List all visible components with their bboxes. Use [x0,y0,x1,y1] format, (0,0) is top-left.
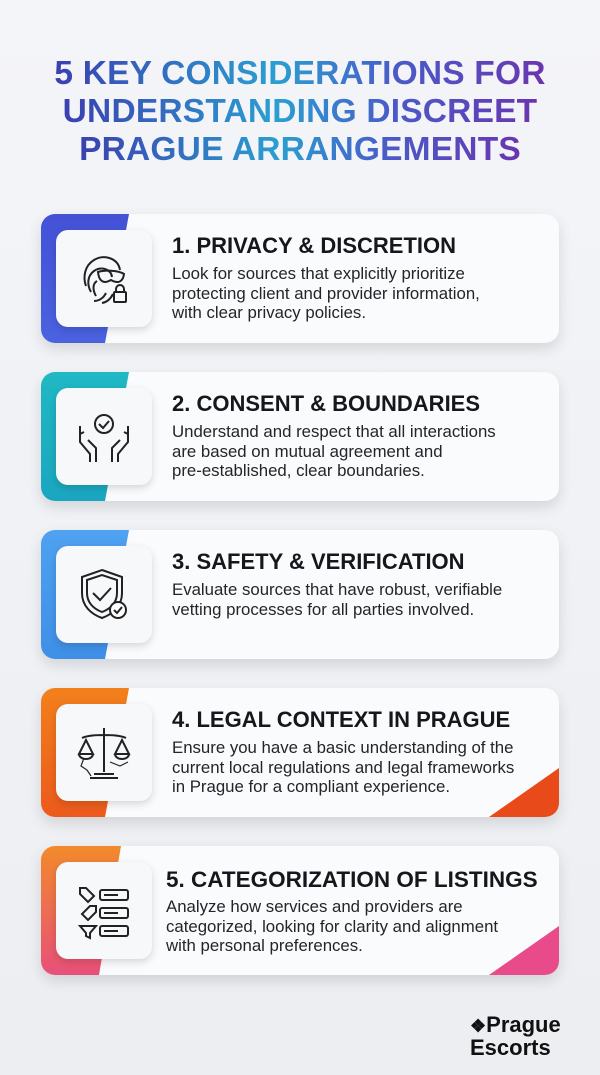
text: current local regulations and legal frameworks [172,758,514,776]
icon: hands check [56,388,152,485]
heading: 5. CATEGORIZATION OF LISTINGS [166,867,538,892]
title: PRAGUE ARRANGEMENTS [79,131,521,168]
logo: Escorts [470,1035,551,1060]
text: vetting processes for all parties involved. [172,600,474,618]
heading: 1. PRIVACY & DISCRETION [172,233,456,258]
logo [470,1012,561,1060]
text: protecting client and provider information, [172,284,480,302]
title [54,55,546,168]
text [172,738,514,796]
icon: shield check [56,546,152,643]
text [172,264,480,322]
text: categorized, looking for clarity and alignment [166,916,498,936]
panel: privacy [41,214,559,343]
text [172,580,502,618]
heading: 3. SAFETY & VERIFICATION [172,549,465,574]
text: Understand and respect that all interactions [172,422,496,441]
panel: categorization [41,846,559,975]
logo: ❖Prague [470,1012,561,1037]
icon: fingerprint mask lock [56,230,152,327]
text [172,422,496,480]
panel: legal [41,688,559,817]
panel: consent [41,372,559,501]
icon: scales [56,704,152,801]
text: Evaluate sources that have robust, verifiable [172,580,502,599]
text: pre-established, clear boundaries. [172,461,425,480]
text: with clear privacy policies. [172,303,366,322]
text: are based on mutual agreement and [172,442,443,460]
text: in Prague for a compliant experience. [172,777,450,796]
text: with personal preferences. [166,936,363,955]
heading: 4. LEGAL CONTEXT IN PRAGUE [172,707,510,732]
icon: tags list [56,862,152,959]
heading: 2. CONSENT & BOUNDARIES [172,391,480,416]
title: UNDERSTANDING DISCREET [63,93,537,130]
text: Look for sources that explicitly prioritize [172,264,465,283]
text: Analyze how services and providers are [166,897,463,916]
title: 5 KEY CONSIDERATIONS FOR [54,55,546,92]
text: Ensure you have a basic understanding of the [172,738,513,757]
text [166,897,498,955]
panel: safety [41,530,559,659]
